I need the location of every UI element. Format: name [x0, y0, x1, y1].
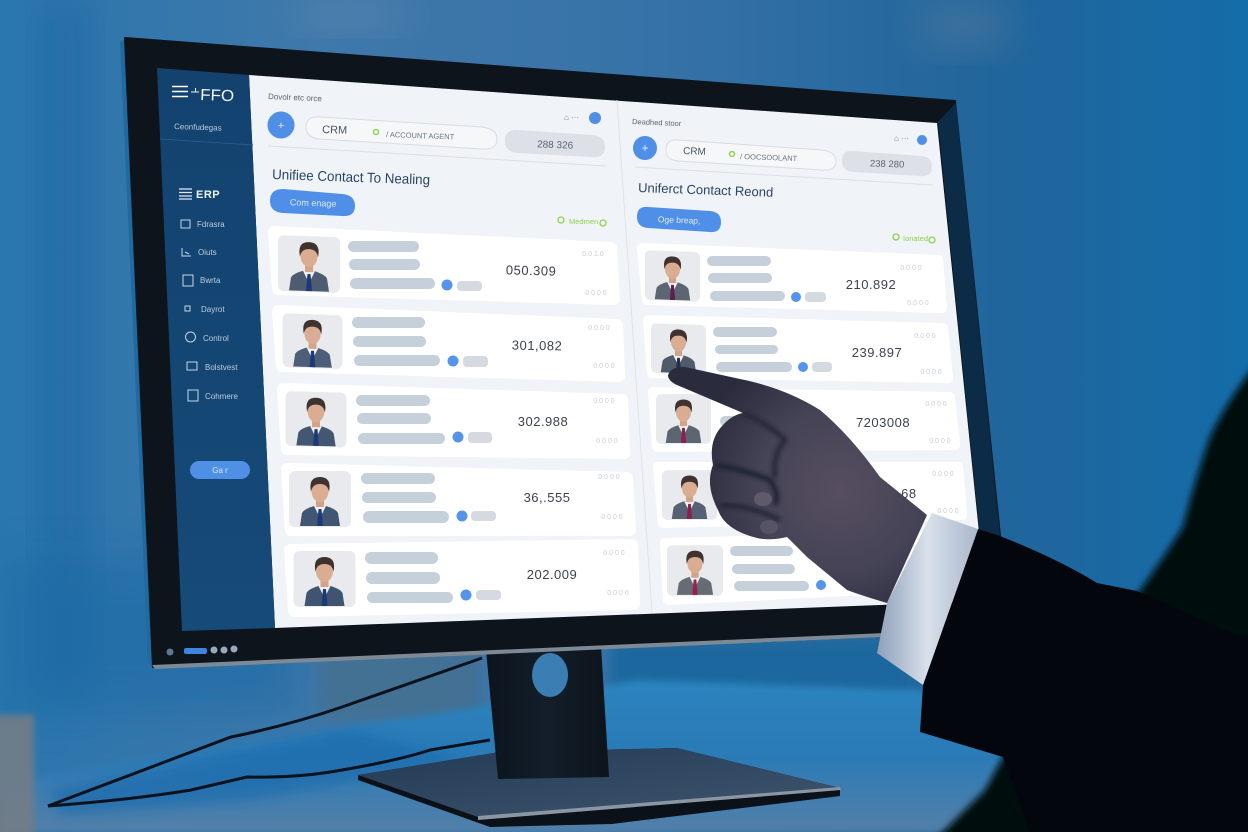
- status dot: [816, 580, 826, 590]
- card: contact 3: [283, 389, 624, 453]
- left status label: [558, 217, 606, 226]
- desk surface: [0, 680, 1248, 832]
- amount: 7203008: [856, 415, 910, 430]
- status chip: [791, 292, 826, 302]
- meta: 0.0 0 0: [603, 550, 625, 557]
- card: right contact 3: [653, 392, 955, 447]
- status chip: [456, 510, 496, 522]
- name placeholder bars: [356, 395, 445, 444]
- card: contact 4: [287, 469, 630, 530]
- meta: 0.0 0 0: [914, 333, 936, 340]
- sidebar logo: [172, 86, 234, 105]
- name placeholder bar: [720, 416, 760, 426]
- sidebar menu items: Control: [203, 334, 229, 343]
- right add button: [633, 136, 657, 160]
- monitor bezel: [120, 38, 1010, 669]
- card: contact 2: [278, 311, 619, 376]
- name placeholder bars: [361, 473, 449, 523]
- finger creases and nails: [716, 413, 785, 534]
- amount: 302.988: [518, 414, 568, 429]
- right action button: Oge breap,: [658, 214, 701, 226]
- sidebar subtitle: Ceonfudegas: [174, 122, 222, 133]
- amount: 301,082: [512, 338, 562, 353]
- panel: right contact column: [632, 117, 970, 600]
- monitor stand: [358, 645, 841, 827]
- right heading: Uniferct Contact Reond: [638, 180, 773, 200]
- right status label: Ionated: [903, 234, 928, 243]
- meta: 0.0 0 0: [585, 290, 607, 297]
- right status label: [893, 234, 935, 243]
- avatar: [645, 250, 700, 302]
- card: contact 5: [290, 545, 634, 611]
- sidebar ERP heading: [179, 189, 220, 201]
- suit and figure silhouette: [920, 360, 1248, 832]
- avatar: [656, 394, 711, 444]
- meta: 0.0 0 0: [925, 401, 947, 408]
- name placeholder bars: [707, 256, 785, 301]
- status chip: [452, 432, 492, 443]
- sidebar button: Ga r: [212, 466, 228, 475]
- sidebar button: [190, 461, 250, 479]
- meta: 0.0 0 0: [907, 300, 929, 307]
- left search pill: / ACCOUNT AGENT: [386, 130, 455, 141]
- avatar: [278, 235, 340, 293]
- sidebar menu items: Fdrasra: [197, 220, 225, 229]
- right action button: [637, 207, 721, 232]
- meta: [593, 398, 618, 445]
- right notification icons: ⌂ ···: [894, 134, 909, 143]
- sidebar menu items: Bolstvest: [205, 363, 238, 372]
- left notification icons: [564, 112, 601, 124]
- screen: sidebar: [157, 68, 275, 631]
- right search pill: CRM: [683, 146, 706, 158]
- card: right contact 4: [658, 467, 962, 523]
- status chip: [798, 362, 832, 372]
- meta: 0.0 0 0: [601, 514, 623, 521]
- sidebar menu items: Cohmere: [205, 392, 238, 401]
- left add button: [268, 112, 294, 138]
- status chip: [442, 280, 482, 291]
- sidebar menu items: Oiuts: [198, 248, 217, 257]
- meta: [900, 265, 929, 307]
- meta: 0.0 0 0: [932, 471, 954, 478]
- amount: 210.892: [846, 277, 896, 292]
- right total pill: [842, 151, 932, 176]
- avatar: [662, 470, 717, 520]
- name placeholder bars: [365, 552, 453, 603]
- left heading: Unifiee Contact To Nealing: [272, 166, 430, 188]
- avatar: [289, 471, 351, 527]
- avatar: [651, 323, 706, 375]
- meta: 0.0 1.0: [582, 251, 604, 258]
- avatar: [667, 545, 723, 596]
- amount: 36,.555: [524, 490, 570, 505]
- sidebar menu items: Dayrot: [201, 305, 225, 314]
- card: right contact 2: [648, 320, 948, 378]
- name placeholder bars: [348, 241, 435, 289]
- avatar: [286, 391, 346, 448]
- left action button: [270, 189, 355, 216]
- meta: 0.0 0 0: [598, 474, 620, 481]
- right search pill: / OOCSOOLANT: [740, 152, 798, 163]
- left search pill: [306, 117, 497, 149]
- meta: [925, 401, 951, 445]
- left total pill: [505, 130, 605, 157]
- card: right contact 1: [642, 248, 942, 308]
- meta: 0.0 0 0: [593, 363, 615, 370]
- name placeholder bars: [352, 317, 440, 366]
- meta: [603, 550, 629, 597]
- avatar: [294, 551, 356, 607]
- amount: 8.68: [889, 486, 917, 501]
- left total pill: 288 326: [537, 139, 574, 152]
- card: right contact 5: [665, 535, 970, 600]
- meta: 0.0 0 0: [596, 438, 618, 445]
- left notification icons: ⌂ ···: [564, 113, 579, 122]
- name placeholder bars: [730, 546, 809, 591]
- status chip: [448, 356, 488, 367]
- right total pill: 238 280: [870, 158, 904, 171]
- bezel indicator lights: [166, 646, 238, 656]
- meta: 0.0 0 0: [588, 325, 610, 332]
- meta: 0.0 0 0: [607, 590, 629, 597]
- meta: [588, 325, 615, 370]
- sidebar ERP heading: ERP: [196, 189, 220, 201]
- left action button: Com enage: [290, 197, 337, 209]
- shirt cuff: [877, 513, 978, 685]
- left add button: +: [278, 120, 284, 132]
- meta: 0.0 0 0: [920, 369, 942, 376]
- left search pill: CRM: [322, 124, 347, 137]
- amount: 239.897: [852, 345, 902, 360]
- panel: left contact column: [268, 92, 634, 611]
- sidebar menu items: Bwrta: [200, 276, 221, 285]
- left status label: Medmen: [569, 217, 598, 226]
- meta: 0.0 0 0: [900, 265, 922, 272]
- status chip: [460, 590, 501, 600]
- sidebar logo: FFO: [200, 87, 234, 105]
- meta: 0.0 0 0: [929, 438, 951, 445]
- amount: 202.009: [527, 567, 577, 582]
- sidebar menu items: [181, 220, 238, 401]
- screen: main panel: [249, 75, 986, 628]
- avatar: [283, 313, 342, 369]
- meta: [914, 333, 942, 376]
- meta: [598, 474, 623, 521]
- name placeholder bars: [713, 327, 792, 372]
- pointing hand: [668, 367, 927, 603]
- meta: 0.0 0 0: [593, 398, 615, 405]
- meta: 0.0 0 0: [937, 508, 959, 515]
- right column breadcrumb: Deadhed stoor: [632, 117, 682, 128]
- meta: [932, 471, 959, 515]
- meta: [582, 251, 607, 297]
- right search pill: [666, 140, 836, 170]
- cables: [48, 658, 490, 806]
- right notification icons: [894, 134, 927, 145]
- right add button: +: [641, 141, 649, 155]
- card: contact 1: [274, 232, 614, 299]
- left column breadcrumb: Dovolr etc orce: [268, 92, 323, 103]
- amount: 050.309: [506, 262, 557, 279]
